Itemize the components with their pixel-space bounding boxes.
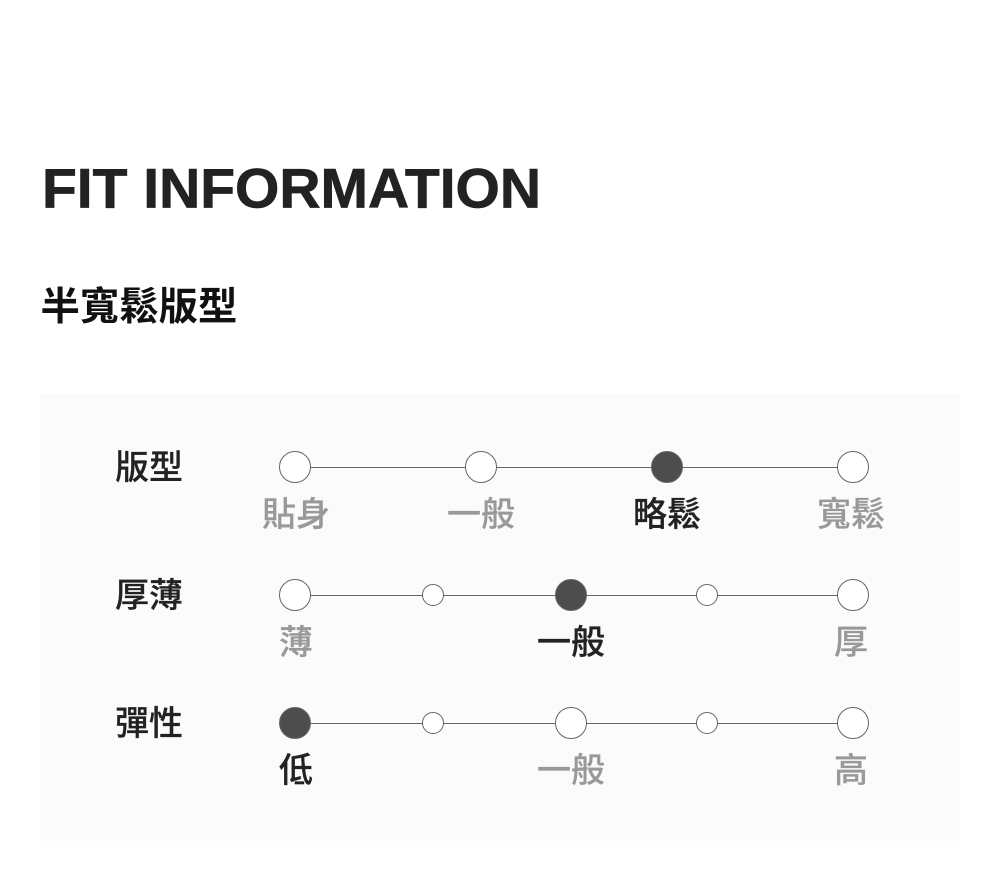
option: high: 高 bbox=[834, 752, 868, 790]
option: regular: 一般 bbox=[447, 496, 515, 534]
scale point: regular, selected bbox=[556, 580, 586, 610]
option: thick: 厚 bbox=[834, 624, 868, 662]
option: low, selected: 低 bbox=[279, 752, 313, 790]
option: regular, selected: 一般 bbox=[537, 624, 605, 662]
option: slightly loose, selected: 略鬆 bbox=[633, 496, 701, 534]
scale point: low, selected bbox=[280, 708, 310, 738]
option: thin: 薄 bbox=[279, 624, 313, 662]
scale point: fitted bbox=[280, 452, 310, 482]
option: fitted: 貼身 bbox=[262, 496, 330, 534]
scale point: thick bbox=[838, 580, 868, 610]
label: thickness: 厚薄 bbox=[115, 577, 183, 615]
scale point: between thin and regular bbox=[422, 584, 444, 606]
scale point: regular bbox=[556, 708, 586, 738]
label: elasticity: 彈性 bbox=[115, 705, 183, 743]
scale point: high bbox=[838, 708, 868, 738]
option: loose: 寬鬆 bbox=[817, 496, 885, 534]
scale point: between regular and thick bbox=[696, 584, 718, 606]
panel: fit chart bbox=[40, 394, 960, 841]
scale point: between regular and high bbox=[696, 712, 718, 734]
scale point: between low and regular bbox=[422, 712, 444, 734]
row: elasticity bbox=[115, 705, 868, 790]
title: FIT INFORMATION bbox=[42, 156, 541, 220]
scale point: regular bbox=[466, 452, 496, 482]
row: fit bbox=[115, 449, 885, 534]
label: fit: 版型 bbox=[115, 449, 183, 487]
scale point: slightly loose, selected bbox=[652, 452, 682, 482]
scale point: thin bbox=[280, 580, 310, 610]
scale point: loose bbox=[838, 452, 868, 482]
row: thickness bbox=[115, 577, 868, 662]
option: regular: 一般 bbox=[537, 752, 605, 790]
subtitle: fit type: 半寬鬆版型 bbox=[40, 285, 237, 329]
